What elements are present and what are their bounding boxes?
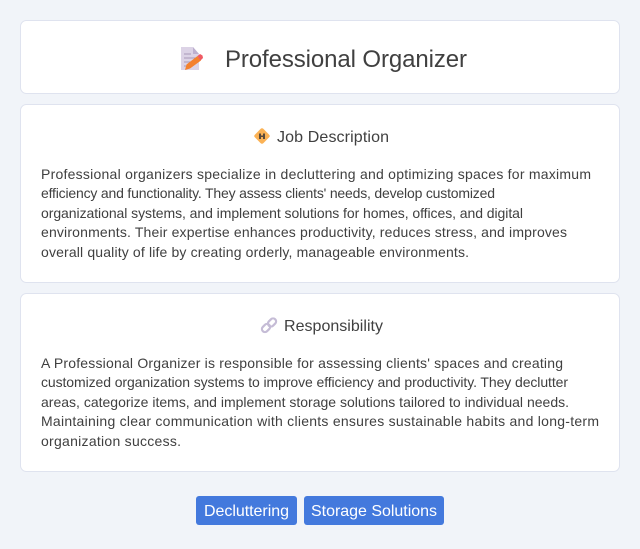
icon: chain link bbox=[261, 317, 277, 333]
text block: responsibility bbox=[41, 355, 599, 449]
text block: job description: efficiency and functionality. They assess clients' needs, develop customized bbox=[41, 185, 495, 201]
panel: job description bbox=[20, 104, 620, 282]
title: Professional Organizer bbox=[225, 46, 467, 73]
text block: responsibility: Maintaining clear communication with clients ensures sustainable habits and long-term bbox=[41, 413, 599, 429]
tag: storage solutions: Storage Solutions bbox=[311, 503, 437, 520]
panel: responsibility bbox=[20, 294, 620, 472]
tag: decluttering bbox=[196, 496, 297, 525]
text block: job description: organizational systems, and implement solutions for homes, offices, and digital bbox=[41, 205, 523, 221]
text block: responsibility: customized organization systems to improve efficiency and productivity. They declutter bbox=[41, 374, 568, 390]
text block: job description bbox=[41, 166, 591, 260]
text block: responsibility: A Professional Organizer is responsible for assessing clients' spaces and creating bbox=[41, 355, 563, 371]
text block: responsibility: areas, categorize items, and implement storage solutions tailored to individual needs. bbox=[41, 394, 569, 410]
heading: job description: Job Description bbox=[277, 129, 389, 146]
text block: job description: Professional organizers specialize in decluttering and optimizing spaces for maximum bbox=[41, 166, 591, 182]
panel: header bbox=[20, 20, 620, 94]
heading: responsibility: Responsibility bbox=[284, 318, 383, 335]
tag: decluttering: Decluttering bbox=[204, 503, 289, 520]
tag: storage solutions bbox=[304, 496, 444, 525]
text block: responsibility: organization success. bbox=[41, 433, 181, 449]
text block: job description: overall quality of life by creating orderly, manageable environments. bbox=[41, 244, 469, 260]
icon: document with pencil bbox=[181, 47, 203, 70]
icon: warning diamond bbox=[254, 128, 270, 144]
text block: job description: environments. Their expertise enhances productivity, reduces stress, and improves bbox=[41, 224, 567, 240]
